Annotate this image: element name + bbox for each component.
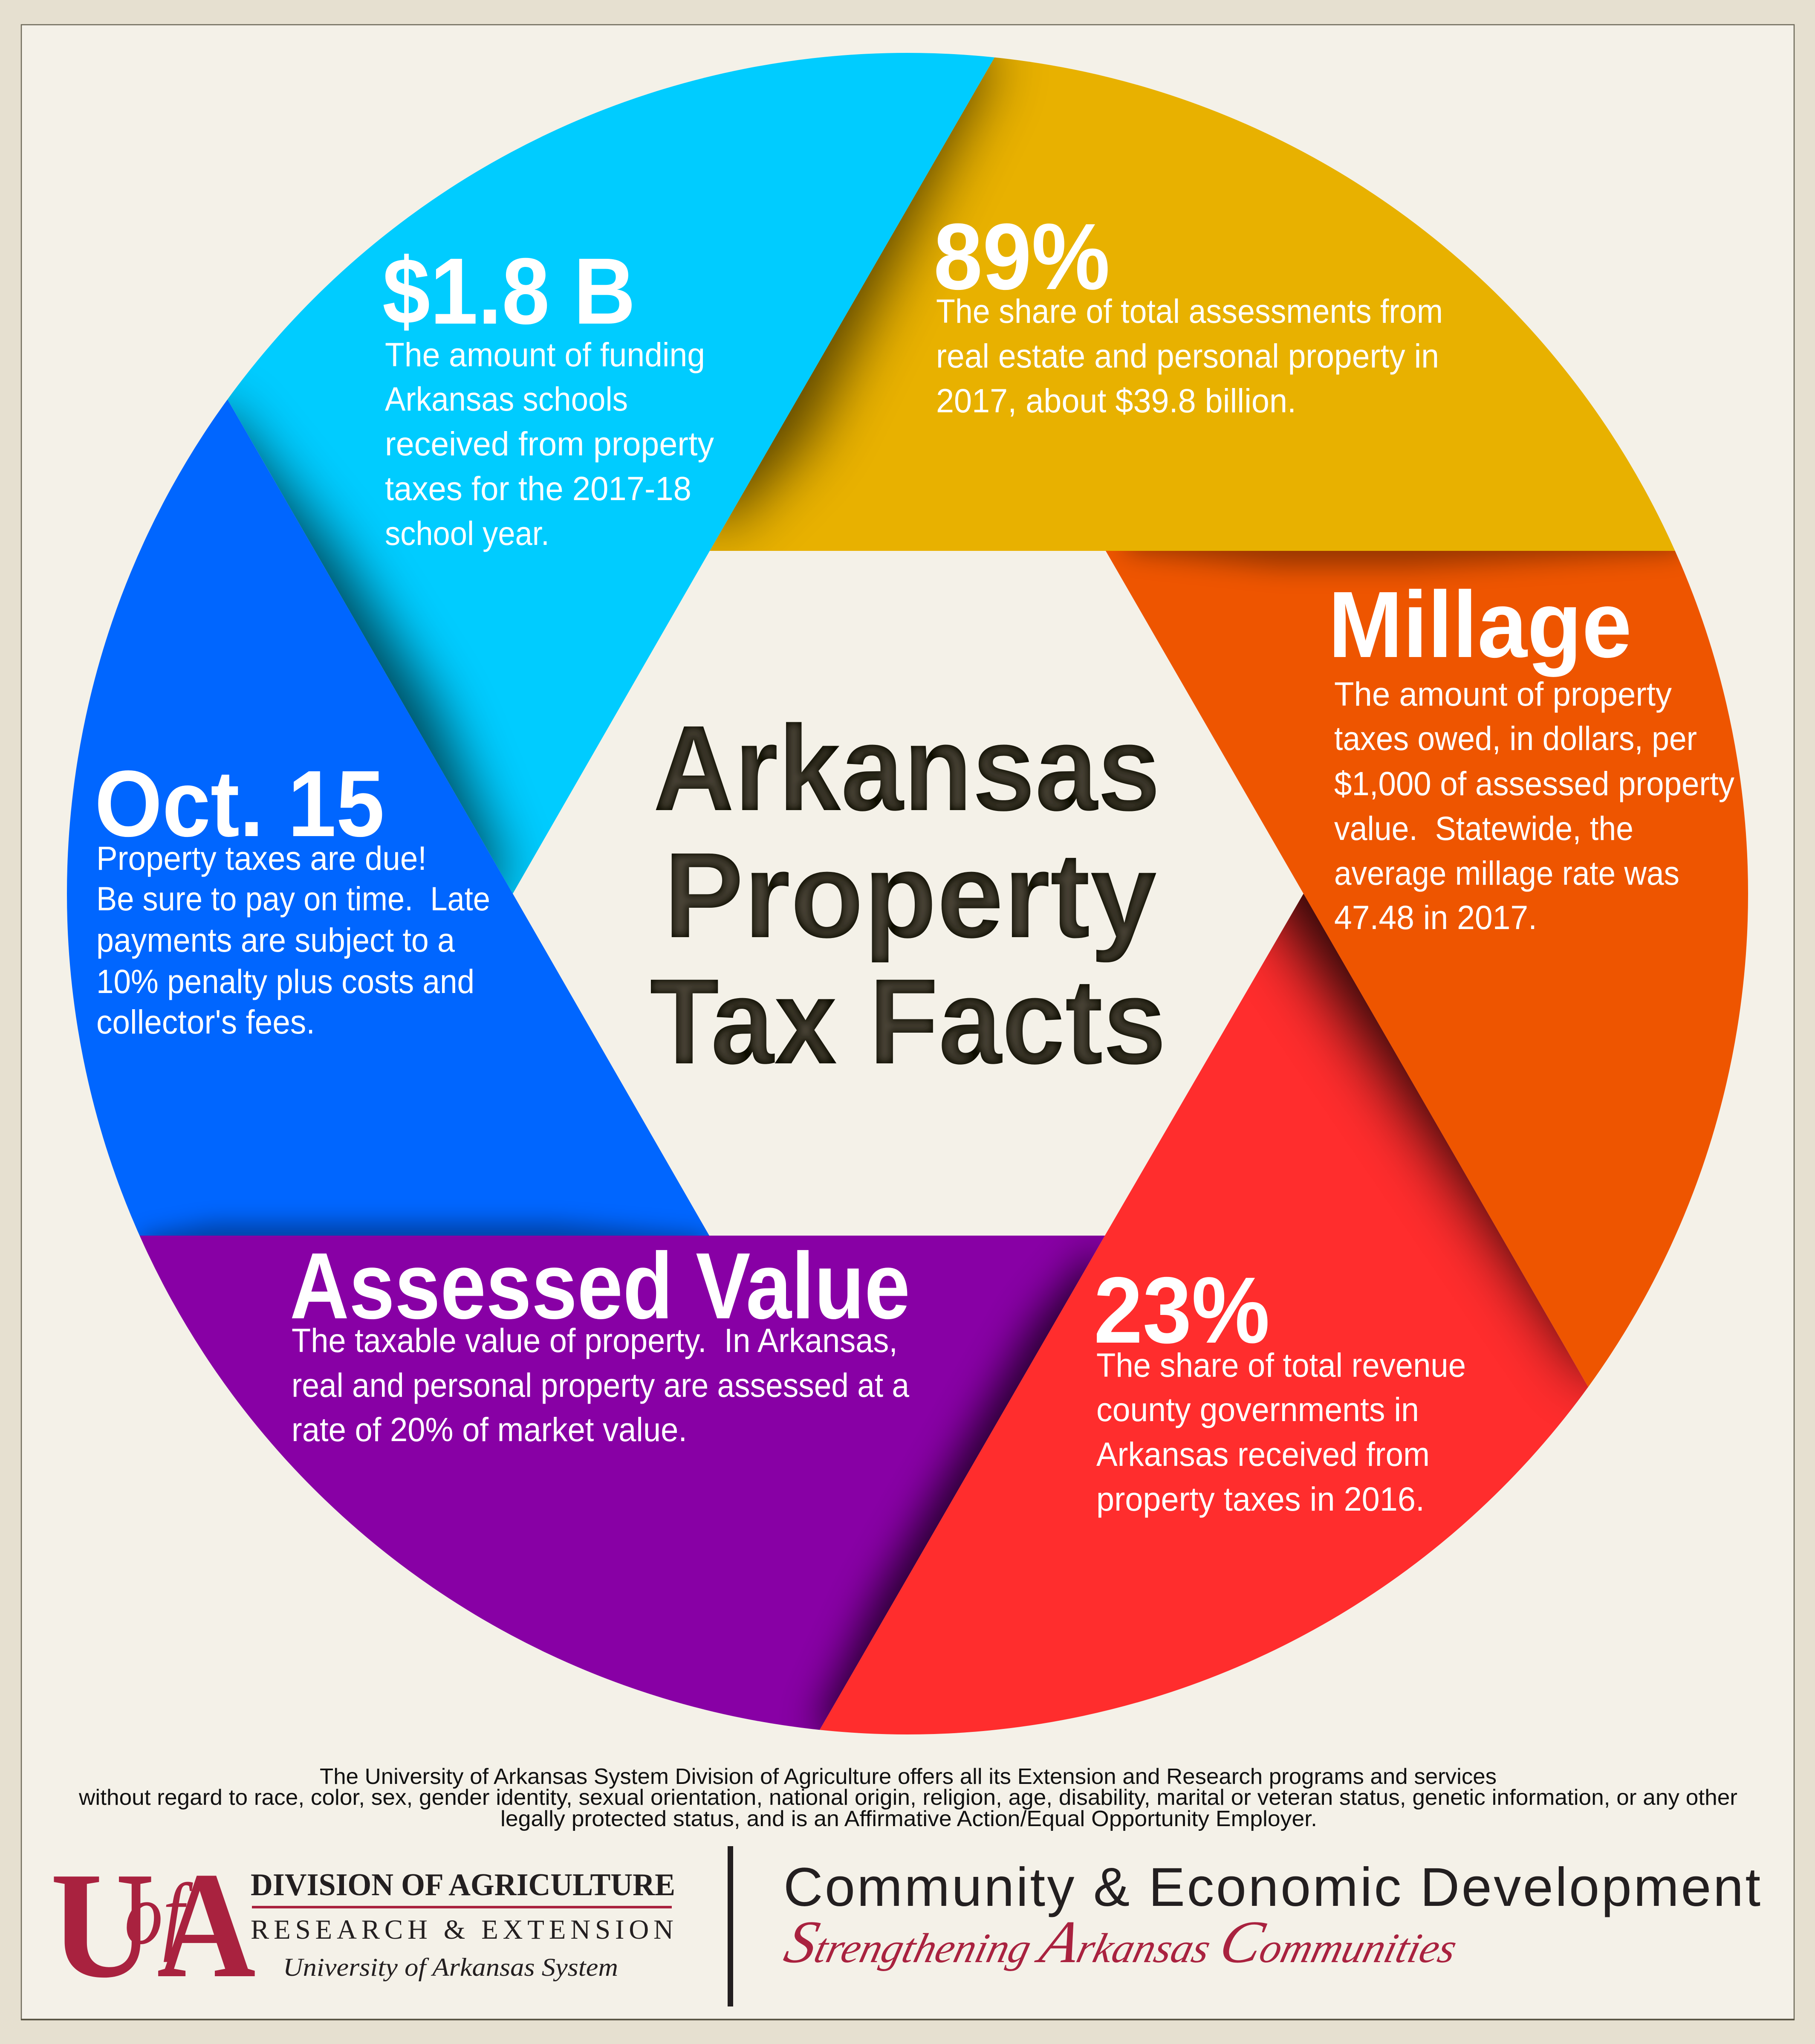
fact: Oct. 15 <box>95 751 490 1041</box>
text: school funding: taxes for the 2017-18 <box>385 469 691 507</box>
text: assessed definition: The taxable value of property. In Arkansas, <box>292 1321 898 1359</box>
heading: Oct. 15: Oct. 15 <box>95 751 384 856</box>
text: share of assessments <box>936 292 1443 420</box>
heading: 23%: 23% <box>1094 1257 1270 1363</box>
title: Arkansas <box>653 701 1160 836</box>
text: county revenue <box>1096 1346 1466 1518</box>
text: share of assessments: 2017, about $39.8 billion. <box>936 382 1296 420</box>
divider <box>728 1846 733 2006</box>
text: county revenue: county governments in <box>1096 1390 1419 1428</box>
text: millage definition: 47.48 in 2017. <box>1334 898 1537 936</box>
text: millage definition: taxes owed, in dollars, per <box>1334 719 1697 757</box>
text: assessed definition: rate of 20% of market value. <box>292 1410 687 1448</box>
text: assessed definition <box>292 1321 909 1448</box>
text: due date: Be sure to pay on time. Late <box>96 880 490 918</box>
text: due date <box>96 839 490 1041</box>
text: school funding: The amount of funding <box>385 336 705 373</box>
heading: 89%: 89% <box>934 204 1110 309</box>
fact: 89% <box>934 204 1443 420</box>
title: Property <box>664 828 1158 964</box>
text: millage definition <box>1334 675 1734 936</box>
panel bottom edge <box>21 2019 1795 2020</box>
title <box>650 701 1166 1089</box>
wordmark: Research and Extension: RESEARCH & EXTENSION <box>251 1914 673 1945</box>
slice: gold <box>710 57 1675 551</box>
title: Tax Facts <box>650 954 1166 1089</box>
text: millage definition: $1,000 of assessed property <box>1334 764 1734 802</box>
text: school funding: received from property <box>385 425 714 463</box>
text: millage definition: average millage rate was <box>1334 854 1679 892</box>
text: share of assessments: real estate and personal property in <box>936 337 1439 375</box>
disclaimer <box>78 1764 1737 1831</box>
fact: $1.8 B <box>382 238 714 552</box>
text: school funding <box>385 336 714 552</box>
text: county revenue: The share of total revenue <box>1096 1346 1466 1384</box>
text: county revenue: property taxes in 2016. <box>1096 1480 1425 1518</box>
slice: red <box>819 894 1588 1734</box>
slice: orange <box>1106 551 1748 1387</box>
fact: Millage <box>1328 572 1734 936</box>
logo: Community and Economic Development <box>778 1857 1760 1975</box>
monogram: UofA <box>50 1841 256 2009</box>
heading: Community & Economic Development: Community & Economic Development <box>783 1857 1760 1918</box>
text: millage definition: The amount of property <box>1334 675 1672 713</box>
slice: purple <box>43 1215 1162 1793</box>
text: share of assessments: The share of total assessments from <box>936 292 1443 330</box>
disclaimer: The University of Arkansas System Division of Agriculture offers all its Extension and Research programs and services <box>320 1764 1497 1789</box>
monogram: UofA: U <box>50 1841 155 2009</box>
heading: $1.8 B: $1.8 B <box>382 238 636 344</box>
heading: Millage: Millage <box>1328 572 1632 677</box>
text: due date: payments are subject to a <box>96 921 455 959</box>
fact: Assessed Value <box>290 1233 910 1448</box>
text: school funding: Arkansas schools <box>385 380 628 418</box>
text: county revenue: Arkansas received from <box>1096 1435 1430 1473</box>
text: school funding: school year. <box>385 514 549 552</box>
text: due date: Property taxes are due! <box>96 839 427 877</box>
text: due date: 10% penalty plus costs and <box>96 962 474 1000</box>
text: due date: collector's fees. <box>96 1003 315 1041</box>
disclaimer: legally protected status, and is an Affirmative Action/Equal Opportunity Employer. <box>500 1807 1317 1831</box>
logo: UofA Division of Agriculture <box>50 1841 675 2009</box>
text: assessed definition: real and personal property are assessed at a <box>292 1366 909 1404</box>
wordmark: Division of Agriculture: DIVISION OF AGRICULTURE <box>251 1867 675 1902</box>
disclaimer: without regard to race, color, sex, gender identity, sexual orientation, national origin, religion, age, disability, marital or veteran status, genetic information, or any other <box>78 1785 1737 1810</box>
monogram: UofA: A <box>157 1841 256 2009</box>
fact: 23% <box>1094 1257 1466 1518</box>
rule <box>252 1906 672 1908</box>
heading: Assessed Value: Assessed Value <box>290 1233 910 1338</box>
tagline: Strengthening Arkansas Communities: Strengthening Arkansas Communities <box>778 1908 1465 1975</box>
text: millage definition: value. Statewide, the <box>1334 809 1633 847</box>
wordmark: University of Arkansas System: University of Arkansas System <box>283 1953 618 1981</box>
slice: blue <box>43 341 767 1322</box>
slice: cyan <box>82 21 1066 938</box>
monogram: UofA: of <box>124 1866 193 1963</box>
